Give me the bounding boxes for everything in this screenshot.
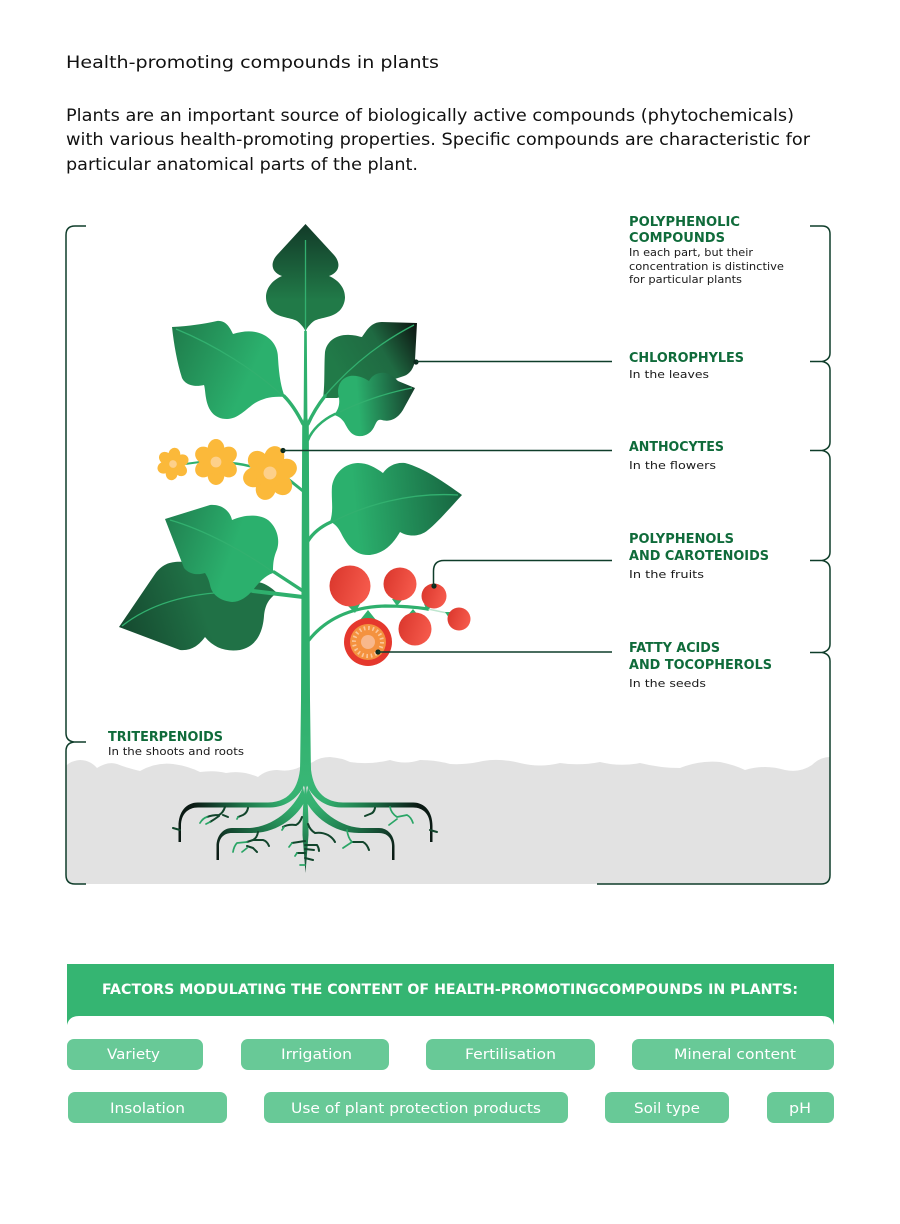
fruit branch xyxy=(309,599,450,640)
label: polyphenolic compounds: POLYPHENOLIC xyxy=(629,215,740,230)
pill: soil type: Soil type xyxy=(634,1101,700,1117)
pill: mineral content: Mineral content xyxy=(674,1047,797,1063)
roots xyxy=(173,762,437,873)
leaf: upper left xyxy=(172,321,303,424)
label: polyphenolic compounds: concentration is distinctive xyxy=(629,260,784,273)
soil xyxy=(66,757,830,884)
pill: irrigation: Irrigation xyxy=(281,1047,352,1063)
leaf: lower left xyxy=(119,562,303,650)
label: fatty acids and tocopherols: AND TOCOPHEROLS xyxy=(629,658,772,673)
label: polyphenols and carotenoids: POLYPHENOLS xyxy=(629,532,734,547)
leaf: upper right xyxy=(308,322,417,424)
label: polyphenolic compounds xyxy=(629,215,784,286)
stem xyxy=(300,331,311,790)
label: fatty acids and tocopherols: FATTY ACIDS xyxy=(629,641,720,656)
pill: fertilisation xyxy=(426,1039,595,1070)
tomato cross-section xyxy=(344,618,392,666)
pill: variety xyxy=(67,1039,203,1070)
leader: fruits xyxy=(431,560,612,589)
label: polyphenols and carotenoids xyxy=(629,532,769,581)
pill: pH xyxy=(767,1092,834,1123)
leader: seeds xyxy=(375,649,612,655)
factors banner: FACTORS MODULATING THE CONTENT OF HEALTH-PROMOTINGCOMPOUNDS IN PLANTS: xyxy=(102,982,798,998)
intro paragraph: with various health-promoting properties. Specific compounds are characteristic for xyxy=(66,130,810,150)
leader: flowers xyxy=(280,448,612,453)
left bracket xyxy=(66,226,86,884)
leader: leaves xyxy=(413,359,612,365)
pill: insolation xyxy=(68,1092,227,1123)
label: fatty acids and tocopherols: In the seeds xyxy=(629,677,706,690)
label: anthocytes xyxy=(629,440,724,472)
pill: pH: pH xyxy=(789,1101,811,1117)
title: Health-promoting compounds in plants xyxy=(66,53,439,73)
label: fatty acids and tocopherols xyxy=(629,641,772,690)
factor pills xyxy=(67,1039,834,1123)
label: chlorophyles: CHLOROPHYLES xyxy=(629,351,744,366)
pill: variety: Variety xyxy=(107,1047,160,1063)
label: polyphenolic compounds: In each part, but their xyxy=(629,246,753,259)
label: polyphenolic compounds: for particular plants xyxy=(629,273,742,286)
label: triterpenoids xyxy=(108,730,244,758)
label: polyphenols and carotenoids: In the fruits xyxy=(629,568,704,581)
label: anthocytes: ANTHOCYTES xyxy=(629,440,724,455)
pill: soil type xyxy=(605,1092,729,1123)
flowers xyxy=(154,439,305,507)
label: chlorophyles xyxy=(629,351,744,381)
intro paragraph: particular anatomical parts of the plant. xyxy=(66,155,418,175)
intro paragraph xyxy=(66,106,810,175)
tomatoes xyxy=(330,566,470,646)
label: chlorophyles: In the leaves xyxy=(629,368,709,381)
pill: fertilisation: Fertilisation xyxy=(465,1047,556,1063)
leaf: middle right xyxy=(308,463,462,555)
pill: plant protection products: Use of plant protection products xyxy=(291,1101,541,1117)
plant illustration xyxy=(119,224,470,873)
pill: irrigation xyxy=(241,1039,389,1070)
leaf: middle left xyxy=(165,505,303,602)
leaf: small right xyxy=(308,373,415,440)
label: triterpenoids: In the shoots and roots xyxy=(108,745,244,758)
label: triterpenoids: TRITERPENOIDS xyxy=(108,730,223,745)
factors banner xyxy=(67,964,834,1025)
right brackets xyxy=(597,226,830,884)
label: polyphenolic compounds: COMPOUNDS xyxy=(629,231,725,246)
leaf: top xyxy=(266,224,345,331)
pill: plant protection products xyxy=(264,1092,568,1123)
intro paragraph: Plants are an important source of biologically active compounds (phytochemicals) xyxy=(66,106,794,126)
pill: mineral content xyxy=(632,1039,834,1070)
label: anthocytes: In the flowers xyxy=(629,459,716,472)
pill: insolation: Insolation xyxy=(110,1101,185,1117)
label: polyphenols and carotenoids: AND CAROTENOIDS xyxy=(629,549,769,564)
